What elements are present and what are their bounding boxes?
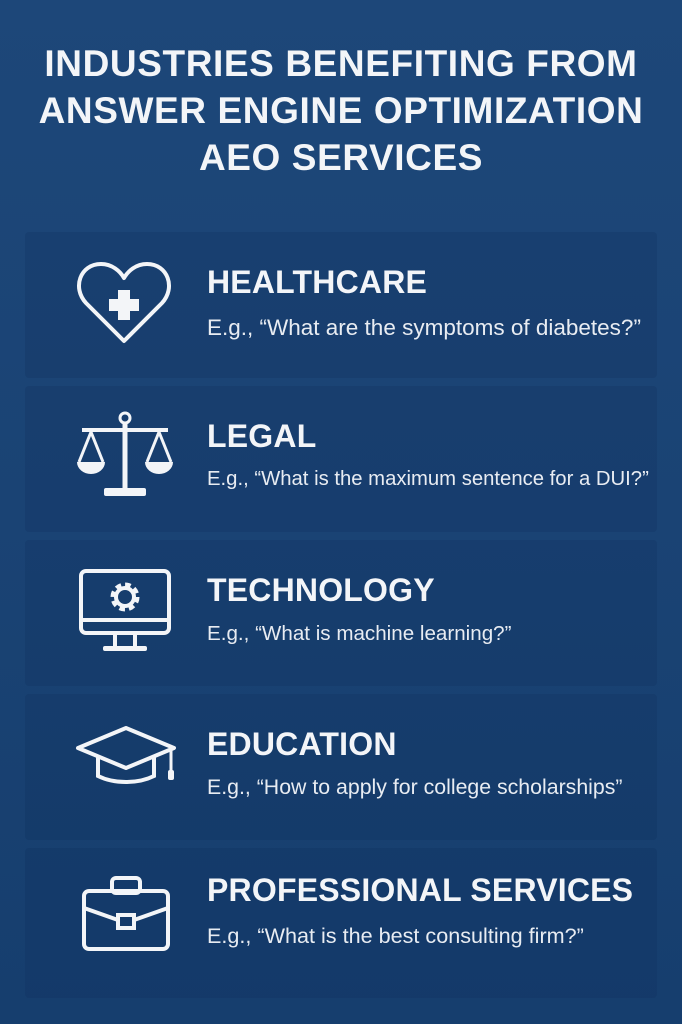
panel: legal <box>25 386 657 532</box>
heading: education: EDUCATION <box>207 726 397 762</box>
text: technology example: E.g., “What is machine learning?” <box>207 622 511 645</box>
icon: heart <box>77 262 171 344</box>
heading: professional services: PROFESSIONAL SERVICES <box>207 872 633 908</box>
text: healthcare example: E.g., “What are the symptoms of diabetes?” <box>207 315 641 340</box>
title: INDUSTRIES BENEFITING FROM <box>44 43 638 84</box>
heading: legal: LEGAL <box>207 418 316 454</box>
panel: technology <box>25 540 657 686</box>
icon: briefcase <box>82 876 170 951</box>
title: ANSWER ENGINE OPTIMIZATION <box>39 90 643 131</box>
icon: scales <box>77 412 173 496</box>
panel: professional services <box>25 848 657 998</box>
icon: graduation cap <box>76 726 176 784</box>
heading: healthcare: HEALTHCARE <box>207 264 427 300</box>
heading: technology: TECHNOLOGY <box>207 572 435 608</box>
panel: healthcare <box>25 232 657 378</box>
text: legal example: E.g., “What is the maximum sentence for a DUI?” <box>207 468 649 490</box>
title: AEO SERVICES <box>199 137 483 178</box>
icon: monitor with gear <box>79 569 171 651</box>
text: professional services example: E.g., “What is the best consulting firm?” <box>207 923 584 948</box>
panel: education <box>25 694 657 840</box>
text: education example: E.g., “How to apply for college scholarships” <box>207 775 622 799</box>
title <box>39 43 643 178</box>
